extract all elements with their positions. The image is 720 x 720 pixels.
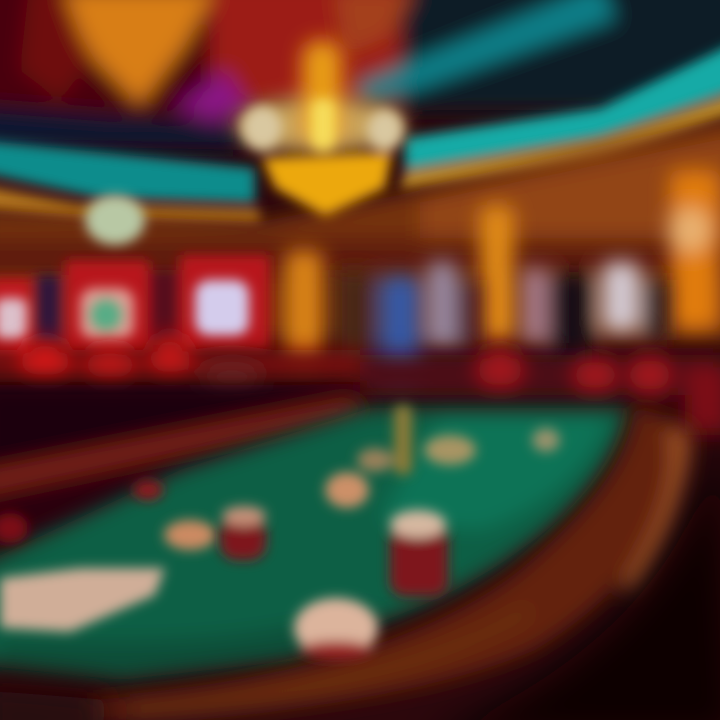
ceiling: [0, 0, 720, 150]
dark floor band and rail: [0, 385, 370, 550]
slot machines: [0, 255, 270, 360]
red seats: [0, 333, 720, 435]
green table: [0, 408, 630, 680]
dark lower right: [0, 420, 720, 720]
wall lamp: [85, 195, 145, 245]
chandelier: [235, 40, 405, 216]
table rail: [90, 405, 695, 720]
columns: [285, 170, 720, 365]
cards and chips: [0, 405, 560, 659]
back wall: [0, 115, 720, 340]
crowd: [335, 262, 667, 380]
teal ceiling bands: [0, 40, 720, 225]
